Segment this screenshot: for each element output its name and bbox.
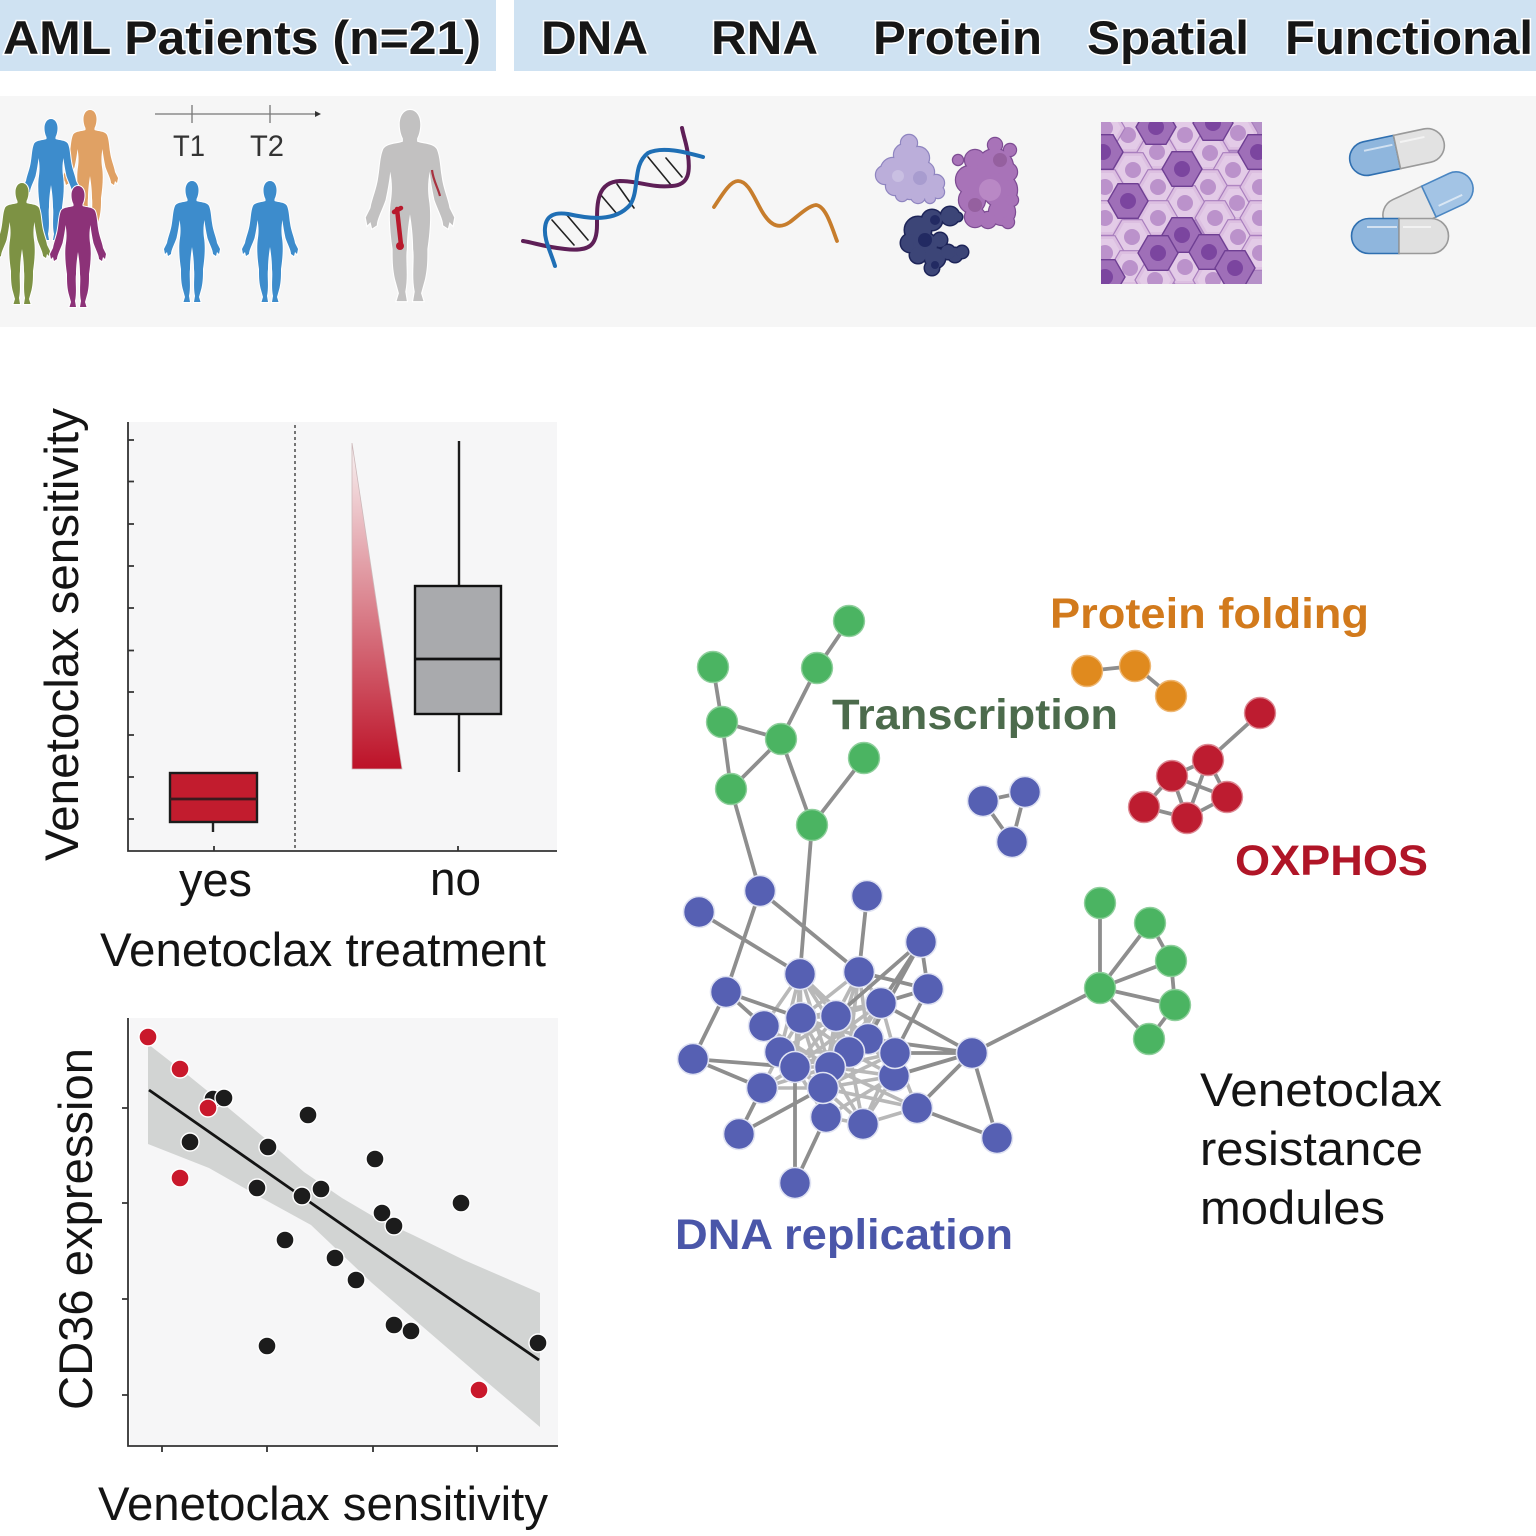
icon: patient cohort figures bbox=[0, 110, 118, 307]
nodes: transcription module bbox=[698, 606, 1190, 1054]
regression line bbox=[149, 1090, 539, 1360]
text block: Venetoclax resistance modules: Venetoclax bbox=[1200, 1063, 1442, 1116]
nodes: OXPHOS module bbox=[1128, 698, 1276, 834]
module label: Transcription: Transcription bbox=[832, 691, 1118, 739]
panel: icon band bbox=[0, 96, 1536, 327]
icon: gray body with bone marrow bbox=[366, 110, 454, 301]
network: resistance modules bbox=[678, 606, 1276, 1198]
network edges: dense core bbox=[762, 972, 917, 1124]
icon: RNA strand bbox=[714, 181, 837, 241]
nodes: DNA replication module bbox=[678, 776, 1040, 1198]
axis tick label: yes: yes bbox=[179, 853, 252, 906]
confidence band bbox=[148, 1044, 540, 1427]
module label: DNA replication: DNA replication bbox=[675, 1211, 1013, 1259]
heading: AML Patients: AML Patients (n=21) bbox=[3, 11, 481, 64]
axis label: CD36 expression: CD36 expression bbox=[49, 1048, 102, 1410]
boxplot: treated yes bbox=[170, 773, 257, 832]
data points: red bbox=[139, 1028, 488, 1399]
header bar: omics layers bbox=[514, 0, 1536, 71]
heading: DNA: DNA bbox=[541, 11, 648, 64]
text block: Venetoclax resistance modules: modules bbox=[1200, 1181, 1385, 1234]
network edges: outer bbox=[693, 621, 1260, 1183]
module label: Protein folding: Protein folding bbox=[1050, 590, 1369, 638]
heading: Protein: Protein bbox=[873, 11, 1042, 64]
divider: dotted treatment separator bbox=[294, 425, 296, 851]
text block: Venetoclax resistance modules: resistance bbox=[1200, 1122, 1423, 1175]
text block: Venetoclax resistance modules bbox=[1200, 1063, 1442, 1234]
icon: timeline T1 T2: T2 bbox=[250, 130, 284, 163]
icon: spatial tissue cells bbox=[1101, 122, 1262, 284]
chart: CD36 scatter plot bbox=[122, 1018, 558, 1452]
axis label: Venetoclax sensitivity horizontal: Venetoclax sensitivity bbox=[98, 1477, 548, 1530]
heading: RNA: RNA bbox=[711, 11, 818, 64]
data points: black bbox=[181, 1089, 547, 1355]
icon: DNA double helix bbox=[523, 128, 703, 266]
icon: drug capsules bbox=[1347, 125, 1479, 254]
axis tick label: no: no bbox=[430, 852, 481, 905]
heading: Functional: Functional bbox=[1285, 11, 1533, 64]
axis label: Venetoclax sensitivity vertical: Venetoclax sensitivity bbox=[35, 407, 88, 861]
icon: timeline T1 T2: T1 bbox=[173, 130, 205, 163]
heading: Spatial: Spatial bbox=[1087, 11, 1249, 64]
icon: protein structures bbox=[876, 135, 1018, 275]
header bar: AML patients bbox=[0, 0, 496, 71]
gradient wedge: sensitivity scale bbox=[352, 443, 402, 769]
boxplot: treated no bbox=[415, 441, 501, 772]
axis label: Venetoclax treatment: Venetoclax treatment bbox=[100, 923, 546, 976]
icon: timeline T1 T2 bbox=[155, 105, 321, 163]
nodes: protein folding module bbox=[1072, 650, 1186, 712]
module label: OXPHOS: OXPHOS bbox=[1235, 837, 1428, 885]
icon: longitudinal patient figures bbox=[164, 181, 298, 302]
chart: venetoclax sensitivity boxplot bbox=[128, 422, 557, 851]
